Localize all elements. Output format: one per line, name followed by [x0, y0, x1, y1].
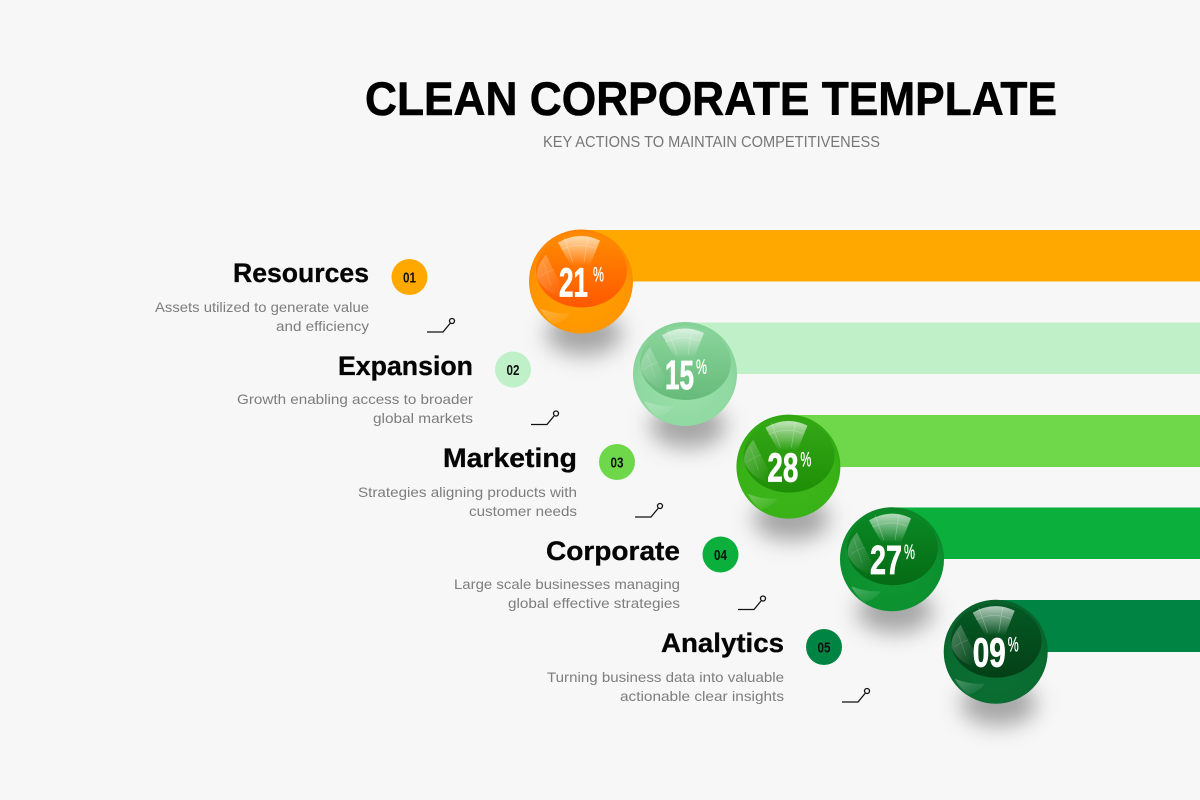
connector icon — [531, 411, 558, 424]
badge 04: 04 — [714, 547, 728, 564]
description: marketing: Strategies aligning products with — [358, 484, 577, 500]
badge 04 — [702, 536, 738, 572]
sphere: 09%: 09 — [973, 630, 1006, 676]
description: expansion: global markets — [373, 410, 473, 426]
subtitle: KEY ACTIONS TO MAINTAIN COMPETITIVENESS — [543, 134, 880, 151]
badge 02: 02 — [506, 362, 520, 379]
connector icon — [738, 596, 766, 610]
item: marketing — [358, 443, 662, 519]
bar: resources — [581, 230, 1200, 282]
description: analytics: Turning business data into valuable — [547, 669, 784, 685]
sphere: 21%: 21 — [559, 260, 588, 306]
heading: marketing: Marketing — [443, 443, 577, 473]
sphere: 28%: 28 — [767, 445, 798, 491]
description: marketing: customer needs — [469, 503, 577, 519]
sphere: 15% — [633, 322, 737, 448]
sphere: 28%: % — [800, 449, 811, 472]
sphere: 28% — [736, 415, 840, 541]
bar: marketing — [788, 415, 1200, 467]
title: CLEAN CORPORATE TEMPLATE — [365, 72, 1057, 125]
item: analytics — [547, 628, 870, 704]
bar: expansion — [685, 322, 1200, 374]
heading: analytics: Analytics — [661, 628, 784, 658]
description: expansion: Growth enabling access to broader — [237, 391, 473, 407]
connector icon — [635, 504, 662, 517]
description: analytics: actionable clear insights — [620, 688, 784, 704]
description: resources: and efficiency — [276, 318, 369, 334]
badge 05 — [806, 629, 842, 665]
heading: expansion: Expansion — [338, 351, 473, 381]
sphere: 27%: % — [904, 541, 915, 564]
badge 01 — [392, 259, 428, 295]
badge 03 — [599, 444, 635, 480]
heading: resources: Resources — [233, 258, 369, 288]
description: analytics — [547, 669, 784, 704]
sphere: 27%: 27 — [870, 537, 902, 583]
description: corporate — [454, 576, 680, 611]
bar: corporate — [892, 508, 1200, 559]
sphere: 15%: 15 — [665, 352, 694, 398]
connector icon — [427, 318, 454, 332]
description: corporate: global effective strategies — [508, 595, 680, 611]
heading: corporate: Corporate — [546, 536, 680, 566]
item: resources — [155, 258, 454, 334]
badge 02 — [495, 352, 531, 388]
sphere: 27% — [840, 507, 944, 633]
description: corporate: Large scale businesses managing — [454, 576, 680, 592]
item: expansion — [237, 351, 558, 426]
description: resources: Assets utilized to generate value — [155, 299, 369, 315]
description: resources — [155, 299, 369, 334]
sphere: 21%: % — [593, 264, 604, 286]
sphere: 09% — [944, 600, 1048, 726]
description: marketing — [358, 484, 577, 519]
badge 01: 01 — [403, 270, 416, 286]
item: corporate — [454, 536, 766, 611]
badge 03: 03 — [610, 454, 624, 472]
badge 05: 05 — [818, 640, 830, 656]
sphere: 09%: % — [1008, 634, 1019, 657]
sphere: 21% — [529, 230, 633, 356]
connector icon — [842, 688, 870, 702]
description: expansion — [237, 391, 473, 426]
sphere: 15%: % — [696, 356, 707, 379]
bar: analytics — [996, 600, 1200, 652]
